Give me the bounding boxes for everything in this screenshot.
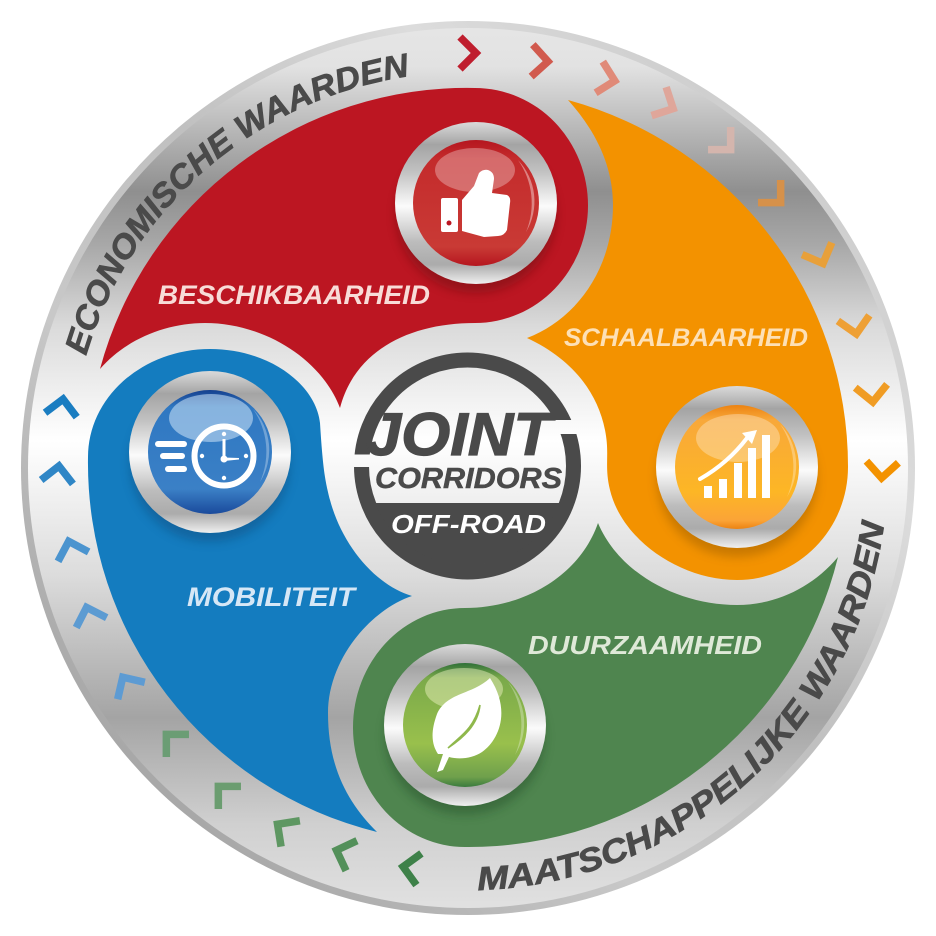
- logo word: joint: JOINT: [366, 401, 557, 468]
- button: thumbs up: [395, 122, 557, 293]
- button: leaf: [384, 644, 546, 815]
- logo: joint corridors off-road: [345, 360, 588, 572]
- label: mobiliteit: MOBILITEIT: [187, 582, 358, 612]
- label: duurzaamheid: DUURZAAMHEID: [528, 630, 762, 660]
- heading: maatschappelijke waarden: MAATSCHAPPELIJKE WAARDEN: [478, 518, 884, 891]
- panel: beschikbaarheid (red): [100, 88, 588, 408]
- label: beschikbaarheid: BESCHIKBAARHEID: [158, 280, 430, 310]
- logo word: corridors: CORRIDORS: [375, 463, 563, 495]
- arrows: green to blue chevrons: [41, 397, 421, 885]
- icon: thumb: [441, 170, 510, 237]
- logo word: off-road: OFF-ROAD: [391, 509, 546, 539]
- button: clock: [129, 371, 291, 542]
- panel: mobiliteit (blue): [88, 349, 412, 832]
- label: schaalbaarheid: SCHAALBAARHEID: [564, 324, 808, 352]
- button: growth chart: [656, 386, 818, 557]
- icon: chart bars and arrow: [700, 430, 770, 498]
- heading: economische waarden: ECONOMISCHE WAARDEN: [66, 53, 407, 356]
- arrows: red to orange chevrons: [460, 37, 898, 479]
- panel: schaalbaarheid (orange): [527, 100, 848, 580]
- icon: leaf: [433, 678, 501, 772]
- panel: duurzaamheid (green): [353, 523, 838, 847]
- icon: fast clock: [155, 426, 254, 486]
